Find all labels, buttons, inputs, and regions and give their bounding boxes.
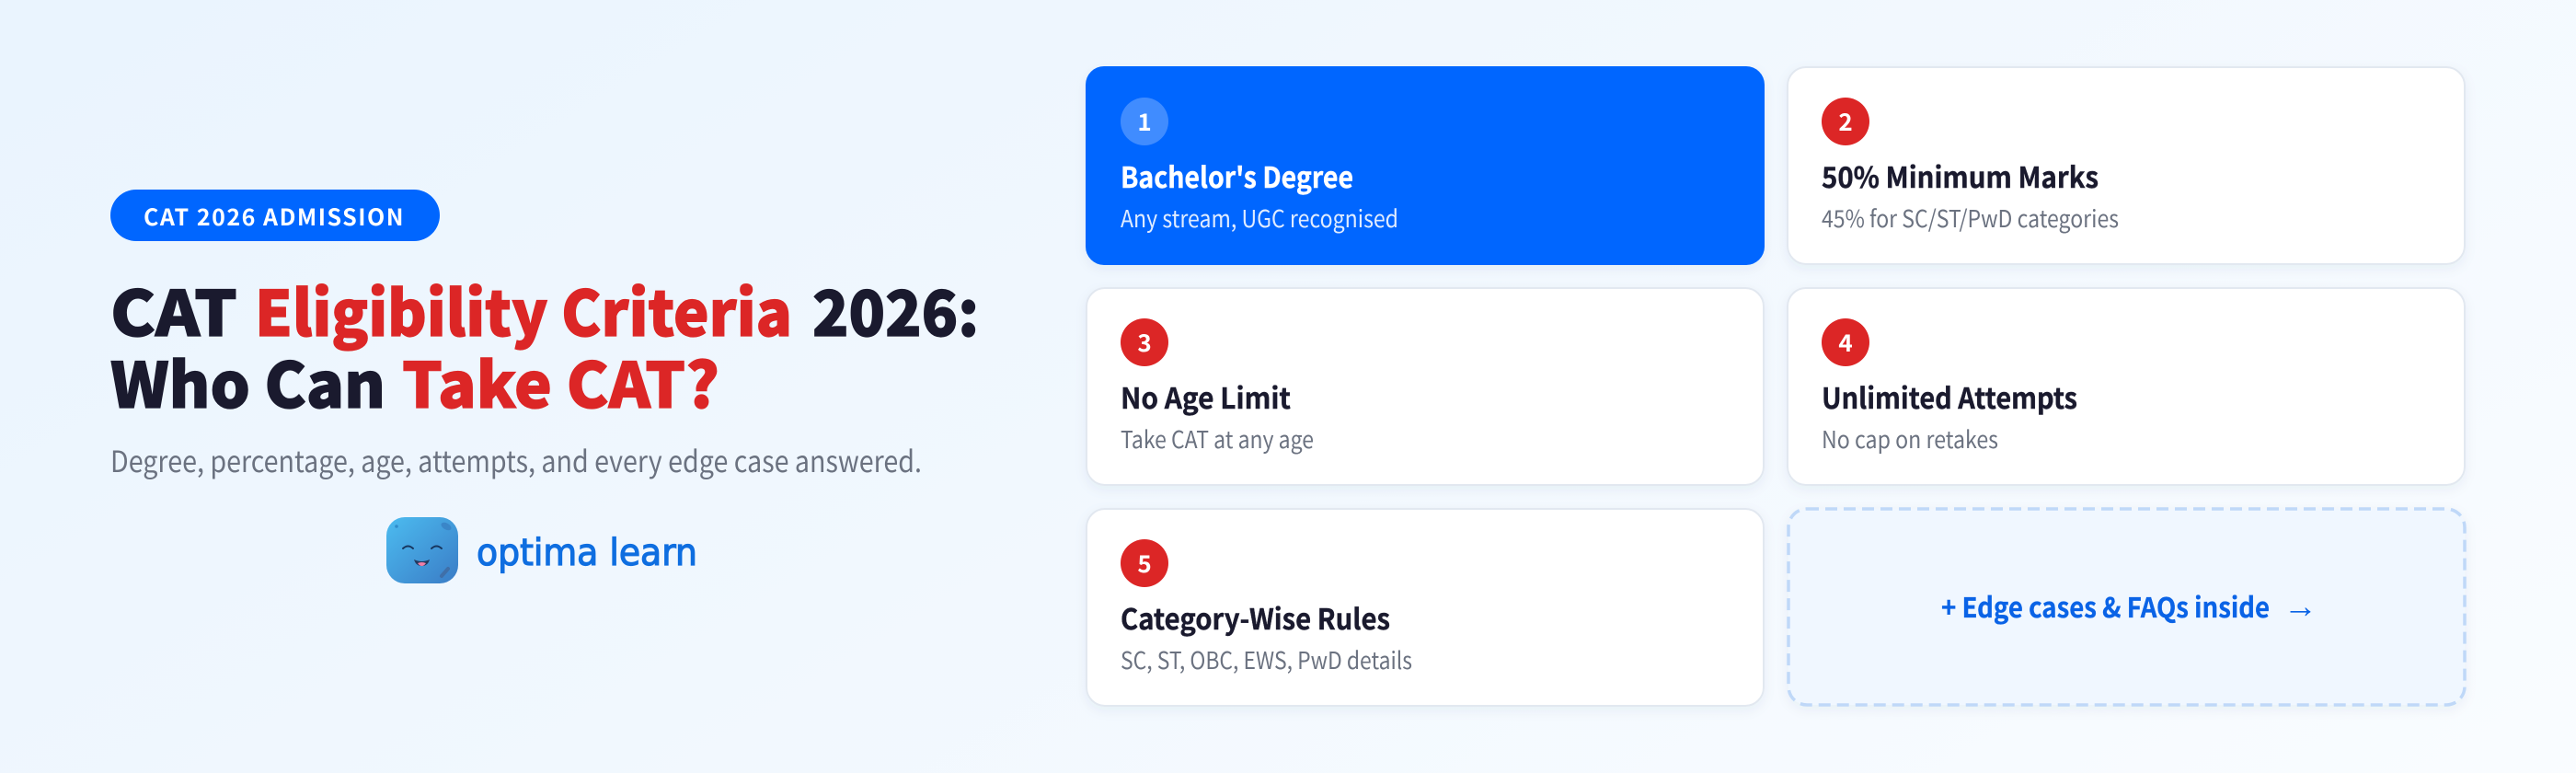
title: Eligibility Criteria (255, 263, 792, 354)
title (110, 263, 979, 426)
number badge 2: 2 (1838, 104, 1853, 138)
title: 2026: (812, 263, 979, 354)
title: Who Can (110, 335, 385, 426)
card 2 heading: 50% Minimum Marks (1822, 155, 2099, 196)
subtitle: Degree, percentage, age, attempts, and every edge case answered. (110, 439, 922, 481)
card 4: Unlimited Attempts (1788, 288, 2465, 485)
card 2 description: 45% for SC/ST/PwD categories (1822, 201, 2119, 235)
number badge 5: 5 (1137, 546, 1152, 580)
number badge 5 (1121, 539, 1168, 587)
card 5 heading: Category-Wise Rules (1121, 596, 1390, 638)
callout text: + Edge cases & FAQs inside (1941, 585, 2270, 626)
card 1 heading: Bachelor's Degree (1121, 155, 1353, 196)
card 6: edge cases callout (1788, 509, 2465, 705)
number badge 4: 4 (1838, 325, 1853, 359)
card 1 description: Any stream, UGC recognised (1121, 201, 1398, 235)
arrow: → (2283, 587, 2317, 625)
left column: intro (110, 190, 979, 583)
card 4 description: No cap on retakes (1822, 421, 1998, 456)
number badge 3 (1121, 318, 1168, 366)
number badge 4 (1822, 318, 1869, 366)
card 4 heading: Unlimited Attempts (1822, 375, 2077, 417)
number badge 1 (1121, 98, 1168, 145)
card 2: 50% Minimum Marks (1788, 67, 2465, 264)
badge: CAT 2026 Admission: CAT 2026 ADMISSION (144, 200, 405, 233)
card 5: Category-Wise Rules (1087, 509, 1764, 706)
badge: CAT 2026 Admission (110, 190, 440, 241)
number badge 1: 1 (1137, 104, 1152, 138)
wordmark: optima learn (477, 532, 697, 574)
title: Take CAT? (402, 335, 719, 426)
number badge 3: 3 (1137, 325, 1152, 359)
card 5 description: SC, ST, OBC, EWS, PwD details (1121, 642, 1412, 676)
card 1: Bachelor's Degree (1086, 66, 1765, 265)
card 3 description: Take CAT at any age (1121, 421, 1314, 456)
card 3: No Age Limit (1087, 288, 1764, 485)
logo: optima learn (386, 517, 697, 583)
title: CAT (110, 263, 237, 354)
card 3 heading: No Age Limit (1121, 375, 1291, 417)
icon: smiling face (386, 517, 458, 583)
number badge 2 (1822, 98, 1869, 145)
